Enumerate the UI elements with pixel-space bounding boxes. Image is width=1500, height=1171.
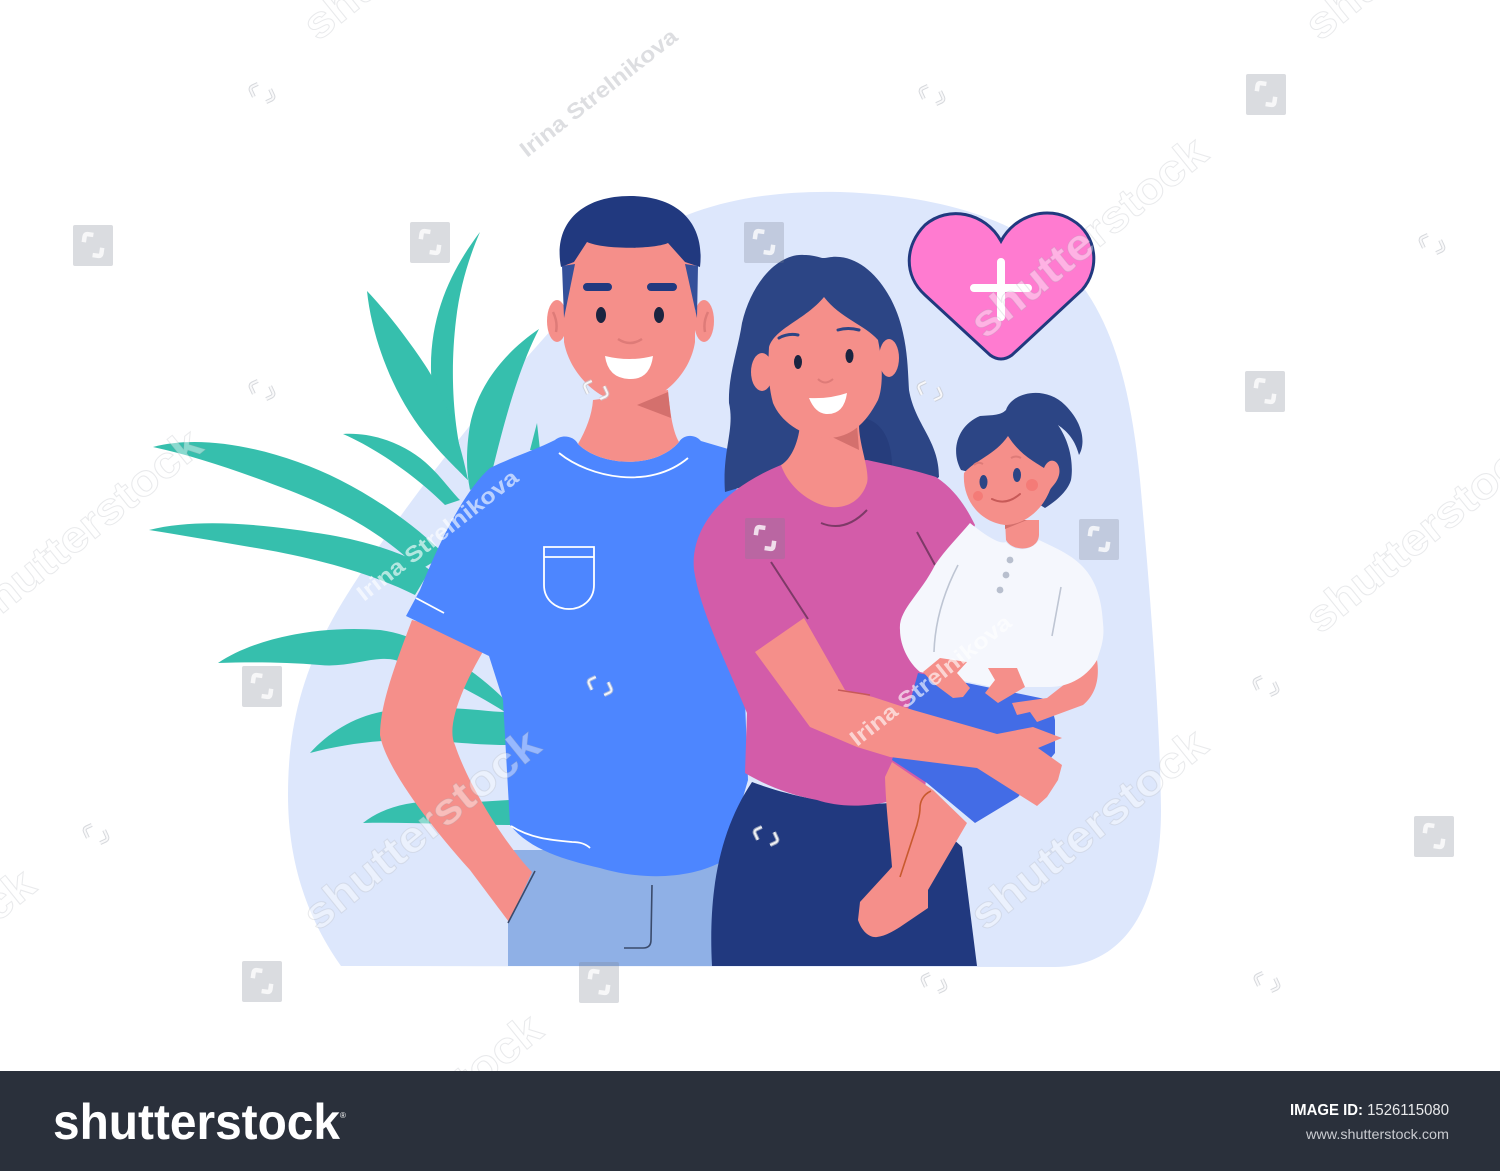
child blouse	[900, 523, 1103, 687]
child skirt	[892, 673, 1055, 823]
woman hair back	[725, 255, 939, 492]
shutterstock watermarks: Irina Strelnikova	[352, 464, 524, 606]
man jeans	[508, 850, 725, 966]
man arm	[380, 620, 532, 922]
woman	[694, 255, 977, 966]
plant leaves	[149, 232, 540, 825]
plus	[974, 262, 1028, 317]
woman arm holding child	[755, 618, 1062, 806]
child hair	[956, 393, 1082, 508]
man brows and eyes	[587, 283, 673, 291]
heart icon	[909, 213, 1094, 359]
child face	[964, 436, 1059, 525]
woman smile	[809, 393, 847, 414]
footer bar	[0, 1071, 1500, 1171]
background blob	[288, 192, 1161, 967]
website: www.shutterstock.com	[1305, 1126, 1449, 1142]
child neck	[1005, 520, 1039, 548]
man	[380, 196, 748, 966]
shutterstock watermarks: shutterstock	[293, 719, 550, 940]
shutterstock watermarks: Irina Strelnikova	[515, 23, 683, 162]
footer logo: shutterstock	[53, 1094, 340, 1150]
woman face	[751, 353, 773, 391]
image id: IMAGE ID: 1526115080	[1290, 1102, 1449, 1119]
man neck	[578, 390, 679, 462]
man hair	[560, 196, 701, 267]
child	[755, 393, 1103, 937]
man shirt	[406, 436, 748, 876]
child back arm	[1012, 660, 1098, 722]
woman skirt	[711, 782, 977, 966]
footer bar: ®	[340, 1111, 346, 1120]
watermark icons	[73, 74, 1454, 1003]
man smile	[605, 356, 653, 379]
woman shirt	[694, 460, 975, 806]
man ears	[547, 300, 567, 342]
child leg	[858, 762, 967, 937]
child hands	[923, 658, 970, 698]
man shirt details	[416, 453, 688, 848]
man face	[564, 240, 695, 404]
woman neck	[781, 425, 868, 507]
shutterstock watermarks: shutterstock	[960, 719, 1217, 940]
shutterstock watermarks: shutterstock	[960, 127, 1217, 348]
shutterstock watermarks: Irina Strelnikova	[845, 609, 1017, 751]
